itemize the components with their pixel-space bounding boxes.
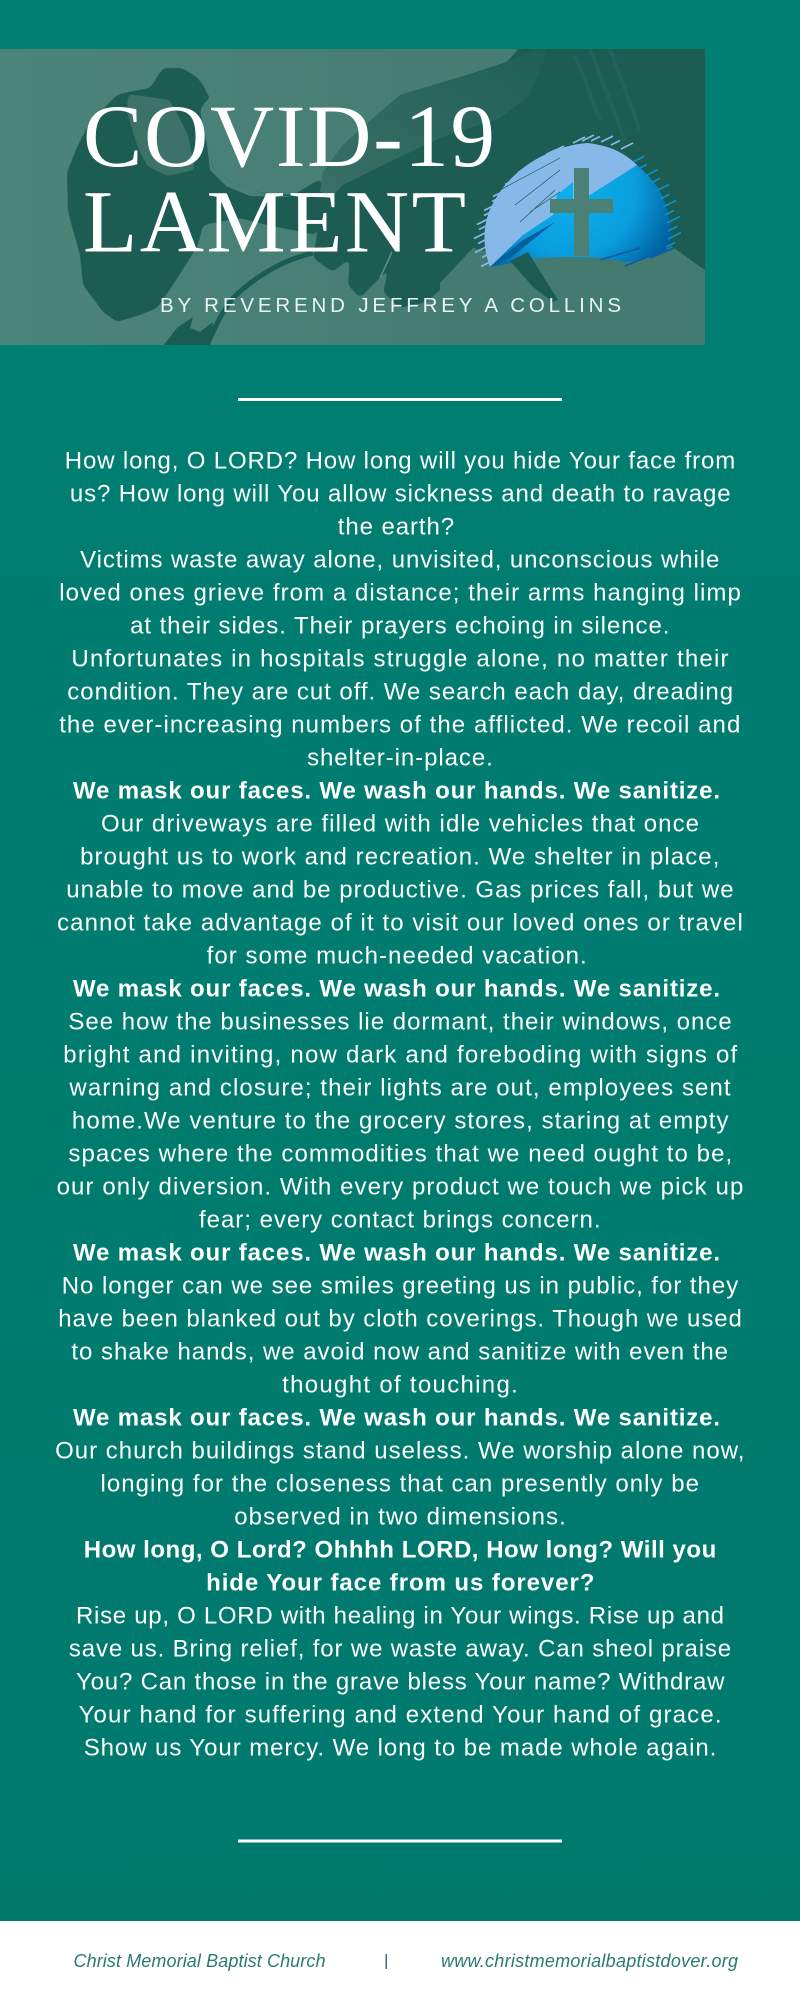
text block: businesses: bright and inviting, now dark and foreboding with signs of	[63, 1041, 738, 1068]
text block: businesses: home.We venture to the grocery stores, staring at empty	[72, 1107, 728, 1134]
text block: opening lament: Victims waste away alone, unvisited, unconscious while	[80, 546, 719, 573]
panel: banner	[0, 49, 705, 345]
church name: Christ Memorial Baptist Church	[74, 1951, 326, 1971]
text block: closing prayer: save us. Bring relief, for we waste away. Can sheol praise	[69, 1635, 731, 1662]
refrain: We mask our faces. We wash our hands. We sanitize.	[73, 975, 720, 1002]
title	[83, 88, 495, 272]
text block: opening lament: loved ones grieve from a distance; their arms hanging limp	[59, 579, 741, 606]
text block: opening lament: the ever-increasing numbers of the afflicted. We recoil and	[59, 711, 740, 738]
text block: driveways: unable to move and be productive. Gas prices fall, but we	[66, 876, 734, 903]
text block: church buildings: Our church buildings stand useless. We worship alone now,	[55, 1437, 744, 1464]
text block: businesses: See how the businesses lie dormant, their windows, once	[68, 1008, 732, 1035]
text block: driveways: brought us to work and recreation. We shelter in place,	[80, 843, 719, 870]
text block: closing prayer: Rise up, O LORD with healing in Your wings. Rise up and	[76, 1602, 724, 1629]
body text	[55, 447, 744, 1761]
bold cry: hide Your face from us forever?	[206, 1569, 594, 1596]
refrain: We mask our faces. We wash our hands. We sanitize.	[73, 1239, 720, 1266]
title: LAMENT	[83, 174, 466, 272]
text block: closing prayer: You? Can those in the grave bless Your name? Withdraw	[76, 1668, 725, 1695]
text block: driveways: for some much-needed vacation.	[207, 942, 587, 969]
image: flower and hand silhouette	[67, 49, 705, 345]
text block: smiles: No longer can we see smiles greeting us in public, for they	[62, 1272, 738, 1299]
top divider	[238, 398, 562, 401]
text block: closing prayer: Show us Your mercy. We long to be made whole again.	[84, 1734, 716, 1761]
text block: opening lament: How long, O LORD? How long will you hide Your face from	[65, 447, 735, 474]
text block: opening lament: us? How long will You allow sickness and death to ravage	[70, 480, 731, 507]
text block: opening lament: Unfortunates in hospitals struggle alone, no matter their	[71, 645, 728, 672]
text block: businesses	[57, 1008, 743, 1233]
text block: smiles: thought of touching.	[282, 1371, 518, 1398]
text block: driveways: cannot take advantage of it to visit our loved ones or travel	[57, 909, 743, 936]
website: www.christmemorialbaptistdover.org	[441, 1951, 738, 1971]
text block: opening lament: shelter-in-place.	[307, 744, 493, 771]
text block: driveways	[57, 810, 743, 969]
byline: BY REVEREND JEFFREY A COLLINS	[160, 294, 621, 317]
refrain: We mask our faces. We wash our hands. We sanitize.	[73, 777, 720, 804]
text block: opening lament: condition. They are cut off. We search each day, dreading	[67, 678, 733, 705]
text block: church buildings: longing for the closeness that can presently only be	[100, 1470, 699, 1497]
separator	[386, 1954, 387, 1969]
text block: businesses: fear; every contact brings concern.	[199, 1206, 600, 1233]
icon: cross	[550, 168, 613, 256]
text block: church buildings: observed in two dimensions.	[234, 1503, 566, 1530]
text block: opening lament: the earth?	[338, 513, 454, 540]
text block: church buildings	[55, 1437, 744, 1530]
text block: businesses: spaces where the commodities that we need ought to be,	[68, 1140, 732, 1167]
refrain: We mask our faces. We wash our hands. We sanitize.	[73, 1404, 720, 1431]
bottom divider	[238, 1840, 562, 1842]
title: COVID-19	[83, 88, 495, 186]
text block: opening lament: at their sides. Their prayers echoing in silence.	[130, 612, 669, 639]
bold cry: How long, O Lord? Ohhhh LORD, How long? Will you	[84, 1536, 716, 1563]
text block: driveways: Our driveways are filled with idle vehicles that once	[101, 810, 699, 837]
text block: smiles	[58, 1272, 742, 1398]
bold cry	[84, 1536, 716, 1596]
footer	[0, 1921, 800, 2000]
text block: opening lament	[59, 447, 741, 771]
text block: businesses: our only diversion. With every product we touch we pick up	[57, 1173, 743, 1200]
icon: blue brush circle with cross	[474, 135, 681, 302]
text block: smiles: have been blanked out by cloth coverings. Though we used	[58, 1305, 742, 1332]
text block: businesses: warning and closure; their lights are out, employees sent	[68, 1074, 731, 1101]
text block: closing prayer	[69, 1602, 731, 1761]
text block: closing prayer: Your hand for suffering and extend Your hand of grace.	[79, 1701, 722, 1728]
text block: smiles: to shake hands, we avoid now and sanitize with even the	[71, 1338, 728, 1365]
